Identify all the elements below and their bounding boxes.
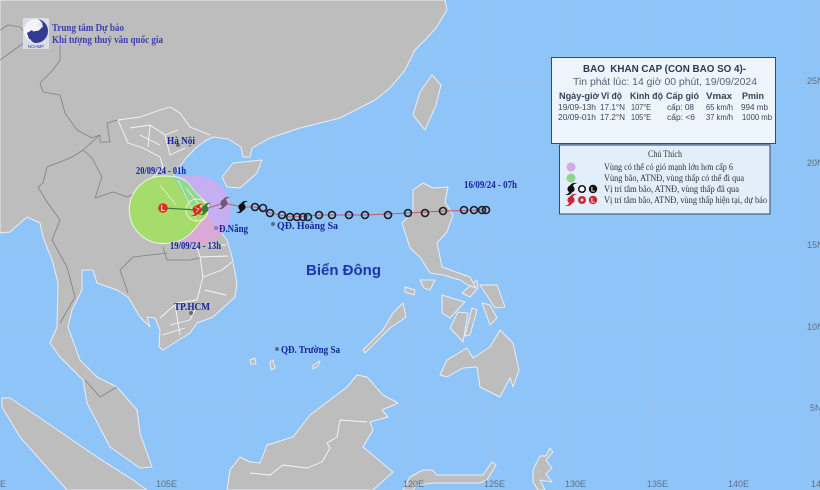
legend row: current positions: [565, 194, 767, 206]
table row 2: 1000 mb: [742, 113, 773, 122]
bulletin title: BAO KHAN CAP (CON BAO SO 4)-: [583, 63, 746, 75]
table row 2: 17.2°N: [600, 113, 625, 122]
table row 2: cấp: <6: [667, 113, 696, 122]
label: current time: 19/09/24 - 13h: [170, 241, 221, 252]
country borders: [0, 25, 200, 397]
latitude and longitude labels: 120E: [403, 479, 424, 489]
label: forecast time: 20/09/24 - 01h: [136, 166, 186, 177]
latitude and longitude labels: 105E: [156, 479, 177, 489]
legend row: forecast area: Vùng bão, ATNĐ, vùng thấp có thể đi qua: [604, 173, 745, 184]
table header: Cấp gió: [666, 91, 699, 102]
latitude and longitude labels: 135E: [647, 479, 668, 489]
forecast track line: [163, 208, 197, 210]
past track positions: [252, 204, 490, 220]
legend row: strong wind: Vùng có thể có gió mạnh lớn hơn cấp 6: [604, 162, 733, 173]
table row 1: 107°E: [631, 103, 651, 112]
agency name: Trung tâm Dự báo: [52, 23, 124, 34]
table row 1: 994 mb: [741, 103, 769, 112]
legend row: forecast area: [566, 173, 745, 184]
logo: [23, 18, 49, 49]
Vietnam and Borneo white boundaries: [118, 107, 367, 475]
legend row: past positions: Vị trí tâm bão, ATNĐ, vùng thấp đã qua: [604, 184, 740, 195]
agency name: Khí tượng thuỷ văn quốc gia: [52, 35, 163, 46]
legend row: current positions: L: [591, 198, 595, 204]
islands: Trường Sa: QĐ. Trường Sa: [281, 345, 340, 356]
icon: forecast low pressure: [158, 203, 168, 213]
islands: Hoàng Sa: QĐ. Hoàng Sa: [277, 221, 338, 232]
map: land masses: [0, 0, 553, 490]
table header: Pmin: [742, 91, 764, 102]
table row 1: 65 km/h: [706, 103, 733, 112]
city: TP.HCM: TP.HCM: [174, 302, 211, 313]
table row 2: 20/09-01h: [558, 113, 596, 122]
icon: forecast low pressure: L: [161, 204, 166, 213]
table row 1: 19/09-13h: [558, 103, 596, 112]
table row 1: cấp: 08: [667, 103, 695, 112]
icon: current storm: [191, 204, 203, 216]
panel: legend: [560, 145, 770, 214]
area: forecast storm path: [129, 176, 208, 244]
table header: Vĩ độ: [601, 91, 622, 102]
logo: NCHMF: [28, 44, 44, 49]
table header: [559, 91, 764, 102]
area: strong wind zone: [170, 176, 231, 244]
table row 1: [558, 103, 769, 112]
legend title: Chú Thích: [648, 150, 682, 160]
sea label: Biển Đông: [306, 262, 381, 279]
table row 1: 17.1°N: [600, 103, 625, 112]
bulletin issue time: Tin phát lúc: 14 giờ 00 phút, 19/09/2024: [573, 77, 757, 88]
icon: past storm positions: [199, 197, 248, 215]
latitude and longitude labels: 130E: [565, 479, 586, 489]
latitude and longitude labels: 140E: [728, 479, 749, 489]
legend row: past positions: [565, 183, 740, 195]
city: Đà Nẵng: Đ.Nẵng: [219, 224, 248, 235]
table row 2: [558, 113, 773, 122]
table header: Ngày-giờ: [559, 91, 599, 102]
table row 2: 37 km/h: [706, 113, 733, 122]
storm track line: [197, 203, 486, 217]
table row 2: 105°E: [631, 113, 651, 122]
table header: Vmax: [706, 91, 733, 102]
latitude and longitude labels: 125E: [484, 479, 505, 489]
agency name: [52, 23, 163, 46]
latitude and longitude labels: E: [0, 479, 6, 489]
legend row: past positions: L: [591, 186, 595, 194]
panel: storm bulletin: [552, 58, 776, 144]
table header: Kinh độ: [630, 91, 663, 102]
city: Hà Nội: Hà Nội: [167, 136, 195, 147]
legend row: current positions: Vị trí tâm bão, ATNĐ, vùng thấp hiện tại, dự báo: [604, 195, 767, 206]
legend row: strong wind: [566, 162, 733, 173]
label: first position time: 16/09/24 - 07h: [464, 180, 517, 191]
